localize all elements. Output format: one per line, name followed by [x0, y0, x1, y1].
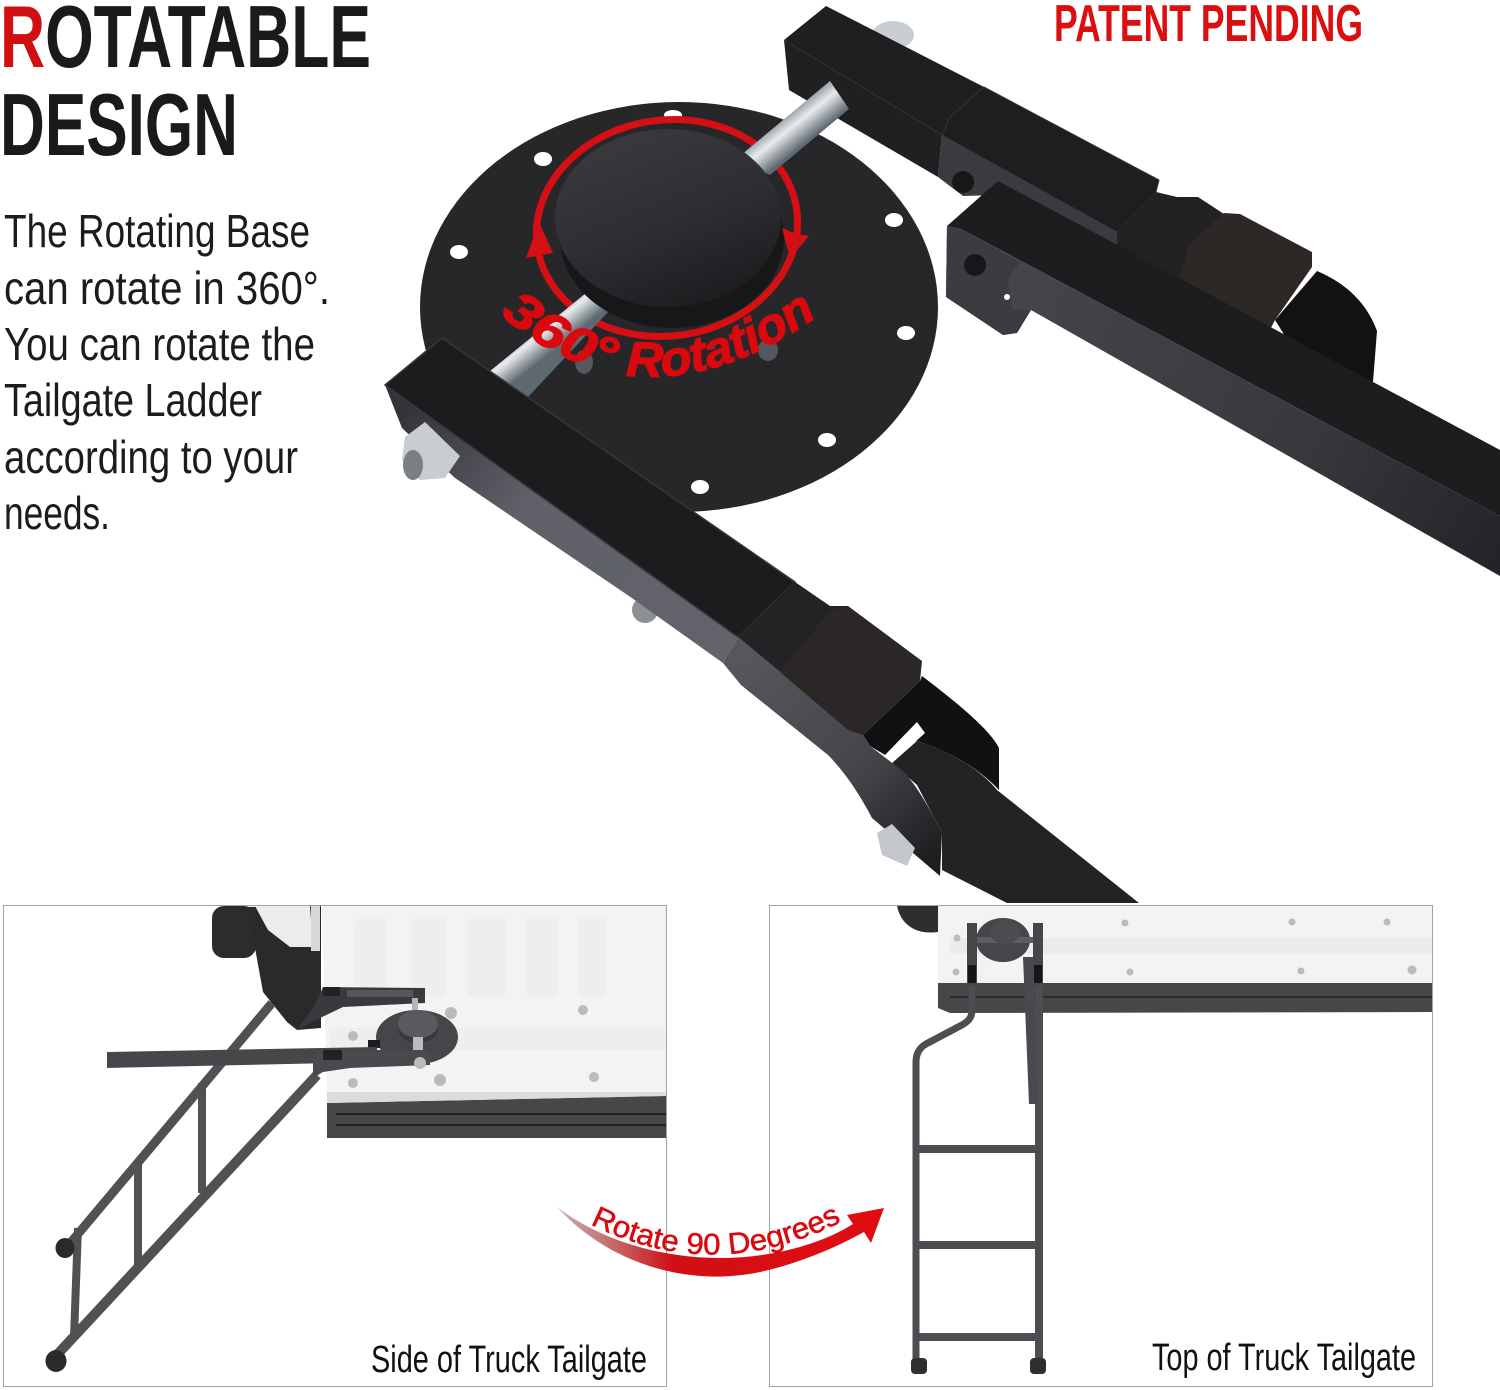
- main photo: rotating base plate: [420, 102, 938, 512]
- ladder feet: [911, 1358, 1046, 1374]
- rotation label: 360°: [503, 294, 620, 362]
- panel: top of truck tailgate: [770, 906, 1432, 1386]
- ladder feet: [46, 1238, 74, 1372]
- arrow: rotate 90 degrees: [557, 1206, 884, 1277]
- ladder front view: [916, 985, 1039, 1362]
- description text: You can rotate the: [4, 318, 315, 370]
- tailgate: [322, 906, 666, 1138]
- description text: Tailgate Ladder: [4, 374, 262, 426]
- description text: according to your: [4, 431, 298, 483]
- rotation arrowheads: [526, 222, 809, 258]
- tire and fender: [212, 906, 321, 1030]
- main photo: long ladder tube: [946, 181, 1500, 576]
- panel: side of truck tailgate: [4, 906, 666, 1386]
- main photo: lower ladder arm: [385, 338, 1139, 903]
- main photo: steel rod: [490, 81, 849, 398]
- fender: [897, 906, 938, 933]
- rotated arms and base: [967, 918, 1043, 1104]
- title: DESIGN: [0, 75, 238, 174]
- description text: The Rotating Base: [4, 205, 310, 257]
- caption: Top of Truck Tailgate: [1152, 1337, 1416, 1379]
- main photo: upper ladder arm: [784, 6, 1377, 382]
- description text: can rotate in 360°.: [4, 262, 330, 314]
- ladder side view: [54, 1003, 317, 1358]
- rotated arms and base: [107, 987, 458, 1078]
- rotation label: word: Rotation: [626, 297, 814, 378]
- arrow: rotate 90 degrees: Rotate 90 Degrees: [592, 1206, 840, 1256]
- description text: [4, 205, 330, 539]
- title: [0, 0, 371, 174]
- caption: Side of Truck Tailgate: [371, 1339, 647, 1381]
- main photo: rotating knob: [555, 129, 784, 328]
- description text: needs.: [4, 487, 110, 539]
- tailgate: [938, 906, 1432, 1013]
- main photo: red rotation ring: [522, 103, 812, 353]
